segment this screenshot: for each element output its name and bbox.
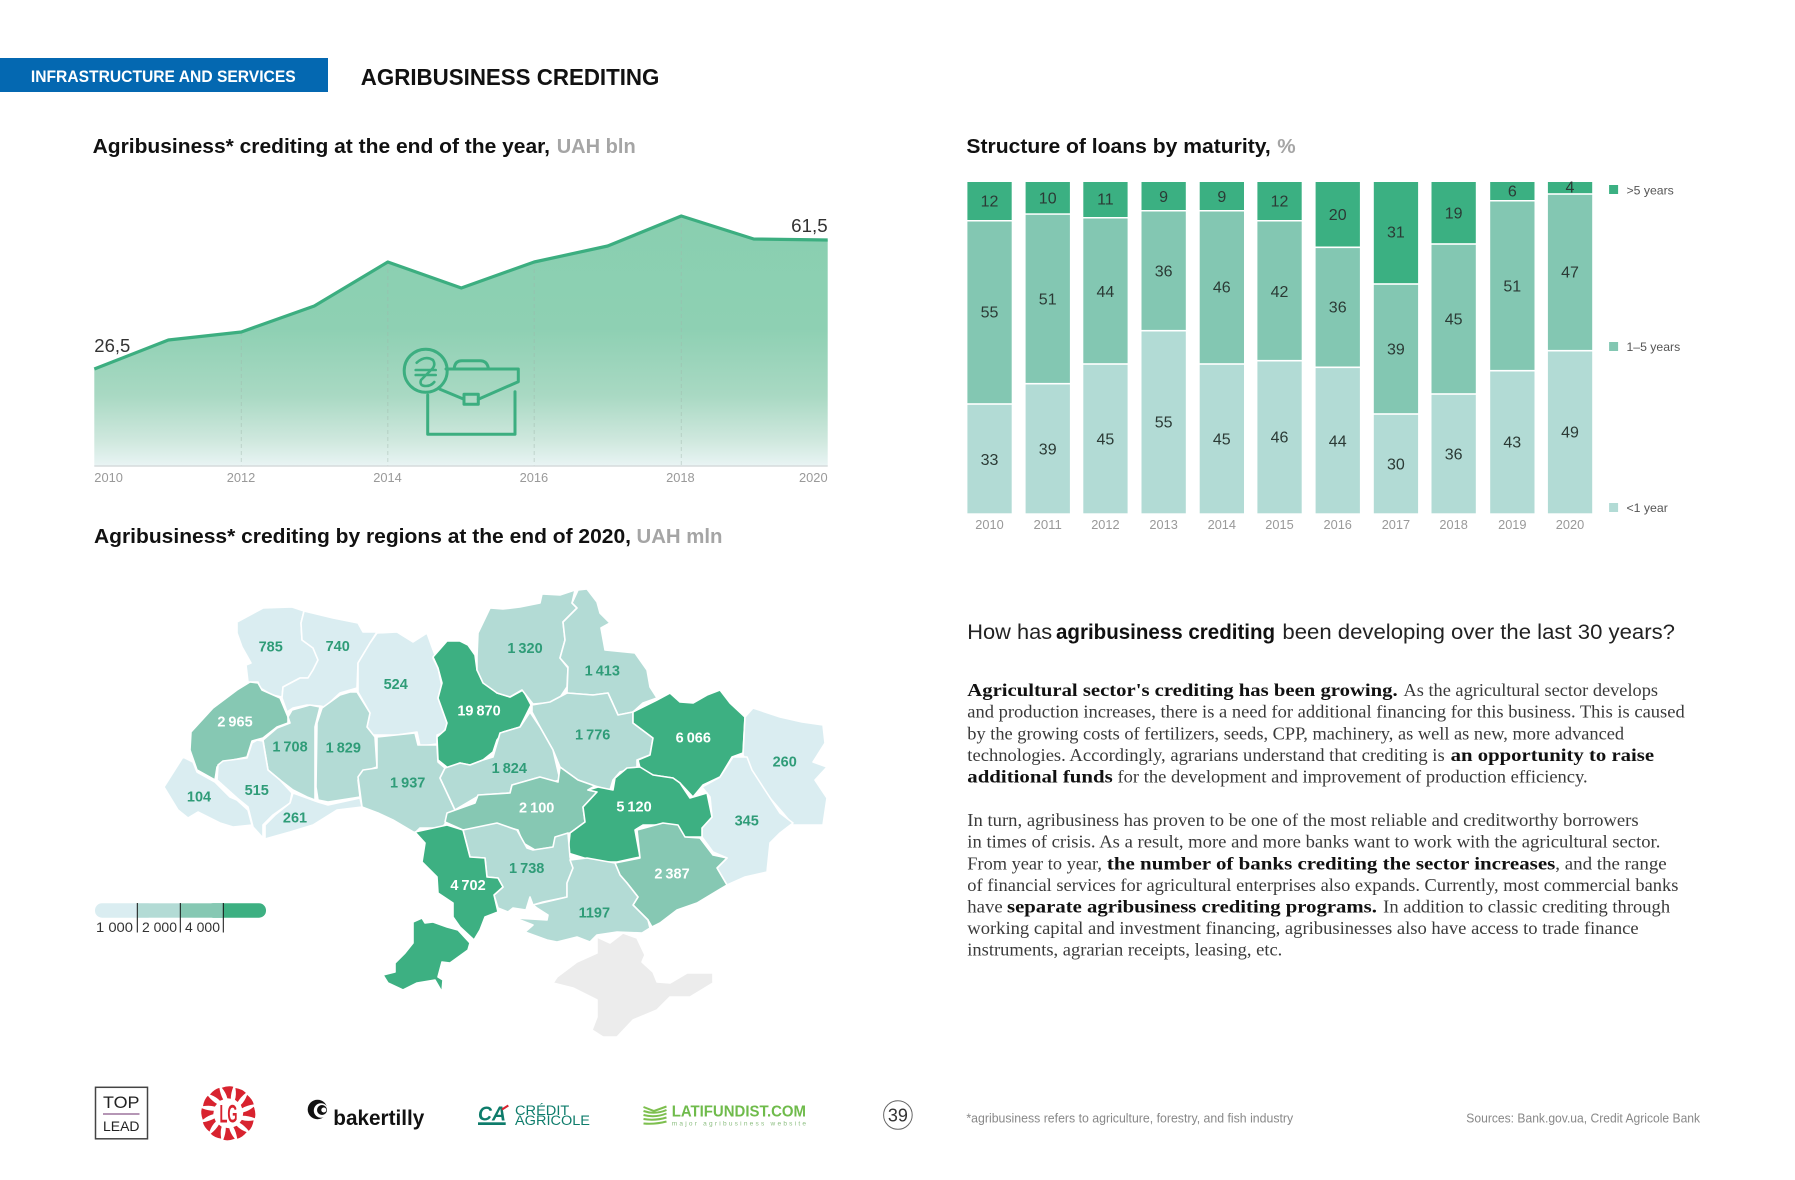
region 1 320 — [477, 590, 577, 704]
map legend: 2 000 — [142, 919, 177, 935]
region 1 776: 1 776 — [575, 728, 610, 744]
section tag: INFRASTRUCTURE AND SERVICES — [31, 67, 296, 86]
bar 2017: 2017 — [1382, 517, 1410, 532]
bar 2011: 10 — [1039, 190, 1057, 208]
logo: Credit Agricole: CRÉDIT — [515, 1103, 569, 1118]
region 785 — [237, 607, 318, 697]
region 1 320: 1 320 — [507, 641, 543, 657]
logo: LG — [201, 1086, 255, 1140]
bar 2012: 2012 — [1091, 517, 1120, 532]
region 1 824 — [440, 712, 560, 810]
heading: structure of loans: % — [1277, 136, 1296, 158]
question heading: been developing over the last 30 years? — [1282, 621, 1675, 644]
value label 2020: 61,5 — [791, 215, 828, 236]
bar 2018: 45 — [1445, 312, 1463, 328]
paragraph 1: an opportunity to raise — [1451, 745, 1654, 765]
paragraph 1: and production increases, there is a need for additional financing for this business. This is caused — [967, 702, 1685, 722]
bar 2020: 2020 — [1556, 517, 1584, 532]
region 260 — [743, 708, 827, 825]
bar 2015: 46 — [1271, 430, 1288, 446]
region 345: 345 — [735, 814, 759, 830]
logo: Baker Tilly: bakertilly — [333, 1107, 425, 1130]
logo: Credit Agricole: AGRICOLE — [515, 1113, 590, 1128]
region 740: 740 — [326, 639, 350, 655]
bar 2010: 12 — [981, 194, 998, 210]
paragraph 2 — [967, 810, 1678, 960]
region 2 100 — [445, 767, 597, 850]
paragraph 1 — [967, 680, 1685, 787]
bar 2014: 45 — [1213, 432, 1231, 448]
question heading — [967, 621, 1675, 644]
logo: Latifundist: LATIFUNDIST.COM — [672, 1104, 806, 1121]
region 1 413 — [560, 589, 657, 715]
bar legend: <1 year — [1626, 501, 1668, 515]
map legend — [95, 903, 266, 935]
value label 2010: 26,5 — [94, 335, 130, 356]
region 1197: 1197 — [579, 906, 610, 922]
heading: crediting by regions: Agribusiness* crediting by regions at the end of 2020, — [94, 526, 631, 548]
paragraph 2: separate agribusiness crediting programs. — [1007, 896, 1377, 916]
region 785: 785 — [259, 640, 283, 656]
region 4 702 — [383, 825, 503, 992]
logo: Credit Agricole: CA — [478, 1104, 506, 1126]
region 1 413: 1 413 — [585, 664, 620, 680]
bar 2016: 20 — [1329, 207, 1347, 224]
bar 2020: 49 — [1561, 424, 1579, 442]
region 515: 515 — [245, 783, 269, 799]
bar 2012: 11 — [1097, 192, 1114, 208]
region 524 — [358, 632, 447, 746]
bar 2019: 2019 — [1498, 517, 1526, 532]
stacked bar chart: loans by maturity — [967, 180, 1680, 532]
paragraph 1: additional funds — [967, 767, 1113, 787]
bar 2013 — [1142, 182, 1186, 532]
region 1 708: 1 708 — [272, 740, 308, 756]
x axis years: 2020 — [799, 470, 828, 485]
bar legend — [1609, 184, 1680, 515]
region 4 702: 4 702 — [450, 878, 486, 894]
bar 2018 — [1432, 182, 1476, 532]
bar 2016: 36 — [1329, 300, 1347, 316]
bar 2017: 39 — [1387, 342, 1405, 358]
paragraph 2: instruments, agrarian receipts, leasing, etc. — [967, 940, 1282, 960]
region 104 — [164, 757, 252, 827]
paragraph 2: In turn, agribusiness has proven to be one of the most reliable and creditworthy borrowers — [967, 810, 1639, 830]
region 740 — [282, 611, 377, 712]
question heading: How has — [967, 621, 1052, 644]
x axis years: 2016 — [520, 470, 548, 485]
paragraph 1: by the growing costs of fertilizers, seeds, CPP, machinery, as well as new, more advanced — [967, 723, 1624, 743]
region 1 937: 1 937 — [390, 775, 425, 791]
question heading: agribusiness crediting — [1056, 621, 1275, 644]
bar 2018: 36 — [1445, 446, 1463, 464]
region 1 738: 1 738 — [509, 861, 544, 877]
paragraph 1: As the agricultural sector develops — [1404, 680, 1658, 700]
bar 2014: 46 — [1213, 280, 1231, 296]
logo: LG: LG — [220, 1100, 238, 1128]
region 1 829: 1 829 — [326, 741, 361, 757]
bar 2013: 36 — [1155, 264, 1173, 280]
bar 2010: 2010 — [975, 517, 1004, 532]
region 261 — [265, 793, 362, 839]
heading: crediting at end of year: Agribusiness* crediting at the end of the year, — [93, 136, 550, 158]
bar 2013: 55 — [1155, 414, 1173, 432]
bar 2011: 2011 — [1034, 517, 1062, 532]
paragraph 2: the number of banks crediting the sector increases — [1107, 853, 1555, 873]
area chart: crediting 2010-2020 — [94, 215, 828, 485]
region 6 066: 6 066 — [676, 731, 711, 747]
bar 2014: 2014 — [1208, 517, 1236, 532]
bar 2015: 42 — [1271, 284, 1288, 301]
page title: AGRIBUSINESS CREDITING — [361, 64, 659, 90]
map legend: 4 000 — [185, 919, 220, 935]
region 2 965 — [190, 682, 288, 780]
bar 2017: 31 — [1387, 224, 1405, 242]
bar 2020: 47 — [1561, 264, 1579, 282]
bar 2015 — [1257, 182, 1302, 532]
region 19 870 — [433, 641, 531, 768]
region 261: 261 — [283, 811, 307, 827]
bar legend: 1–5 years — [1626, 340, 1680, 354]
bar 2017: 30 — [1387, 456, 1405, 474]
bar 2015: 12 — [1271, 194, 1288, 210]
region 2 387 — [615, 823, 727, 927]
region 1 829 — [316, 692, 377, 802]
bar 2018: 19 — [1445, 206, 1463, 222]
choropleth map of Ukraine — [164, 589, 827, 1037]
page number: 39 — [888, 1106, 908, 1126]
region 5 120 — [568, 767, 712, 862]
region 6 066 — [633, 690, 745, 797]
bar 2019: 51 — [1503, 278, 1521, 296]
region 5 120: 5 120 — [616, 800, 652, 816]
x axis years: 2014 — [373, 470, 402, 485]
bar 2020 — [1548, 180, 1592, 532]
icon: briefcase with hryvnia coin — [404, 349, 518, 434]
bar legend: >5 years — [1626, 184, 1674, 198]
region 1 708 — [263, 705, 320, 800]
region: Crimea — [553, 933, 713, 1037]
bar 2016: 2016 — [1324, 517, 1352, 532]
sources: Sources: Bank.gov.ua, Credit Agricole Bank — [1466, 1112, 1701, 1126]
region 524: 524 — [384, 677, 408, 693]
paragraph 2: In addition to classic crediting through — [1383, 896, 1670, 916]
map legend: 1 000 — [96, 919, 133, 935]
paragraph 1: Agricultural sector's crediting has been growing. — [967, 680, 1398, 700]
x axis years — [94, 470, 828, 485]
logo: Top Lead — [96, 1087, 148, 1139]
region 2 100: 2 100 — [519, 801, 554, 817]
bar 2012: 44 — [1097, 284, 1114, 301]
paragraph 2: working capital and investment financing, agribusinesses also have access to trade finance — [967, 918, 1639, 938]
paragraph 1: technologies. Accordingly, agrarians understand that crediting is — [967, 745, 1445, 765]
region 345 — [702, 757, 793, 885]
bar 2019: 43 — [1503, 434, 1521, 452]
logo: Top Lead: TOP — [103, 1093, 140, 1112]
bar 2014: 9 — [1217, 189, 1226, 206]
section tag — [0, 58, 328, 92]
page number — [884, 1101, 912, 1129]
logo: Latifundist: major agribusiness website — [672, 1121, 806, 1128]
paragraph 1: for the development and improvement of production efficiency. — [1118, 767, 1588, 787]
region 1 937 — [358, 733, 455, 833]
region 1 776 — [532, 693, 653, 790]
logo: Top Lead: LEAD — [103, 1119, 140, 1134]
bar 2013: 9 — [1159, 189, 1168, 206]
logo: Credit Agricole — [478, 1103, 590, 1128]
bar 2017 — [1374, 182, 1418, 532]
bar 2012: 45 — [1097, 432, 1114, 448]
bar 2011: 51 — [1039, 292, 1057, 308]
x axis years: 2018 — [666, 470, 695, 485]
region 1197 — [515, 858, 650, 942]
paragraph 2: in times of crisis. As a result, more and more banks want to work with the agricultural sector. — [967, 832, 1660, 852]
footnote: *agribusiness refers to agriculture, forestry, and fish industry — [966, 1112, 1294, 1126]
region 2 387: 2 387 — [654, 867, 690, 883]
logo: Baker Tilly — [308, 1100, 425, 1130]
bar 2012 — [1083, 182, 1128, 532]
heading: crediting by regions: UAH mln — [636, 526, 722, 548]
bar 2016 — [1316, 182, 1360, 532]
bar 2015: 2015 — [1265, 517, 1294, 532]
region 515 — [217, 740, 292, 838]
bar 2011 — [1026, 182, 1070, 532]
x axis years: 2012 — [227, 470, 255, 485]
bar 2014 — [1200, 182, 1244, 532]
paragraph 2: of financial services for agricultural enterprises also expands. Currently, most commercial banks — [967, 875, 1678, 895]
bar 2019 — [1490, 182, 1534, 532]
heading: structure of loans: Structure of loans by maturity, — [966, 136, 1271, 158]
bar 2020: 4 — [1566, 180, 1575, 196]
region 104: 104 — [187, 790, 211, 806]
bar 2016: 44 — [1329, 434, 1347, 450]
heading: crediting at end of year: UAH bln — [557, 136, 636, 158]
bar 2013: 2013 — [1149, 517, 1178, 532]
bar 2010: 33 — [981, 452, 998, 469]
bar 2011: 39 — [1039, 442, 1057, 458]
region 1 824: 1 824 — [492, 761, 527, 777]
region 1 738 — [463, 823, 573, 912]
paragraph 2: , and the range — [1555, 853, 1667, 873]
bar 2010: 55 — [981, 304, 998, 322]
paragraph 2: have — [967, 896, 1003, 916]
region 2 965: 2 965 — [217, 715, 253, 731]
paragraph 2: From year to year, — [967, 853, 1102, 873]
bar 2010 — [967, 182, 1012, 532]
bar 2018: 2018 — [1439, 517, 1468, 532]
x axis years: 2010 — [94, 470, 123, 485]
bar 2019: 6 — [1508, 184, 1517, 200]
region 260: 260 — [773, 755, 797, 771]
region 19 870: 19 870 — [457, 704, 501, 720]
logo: Latifundist — [644, 1104, 806, 1128]
